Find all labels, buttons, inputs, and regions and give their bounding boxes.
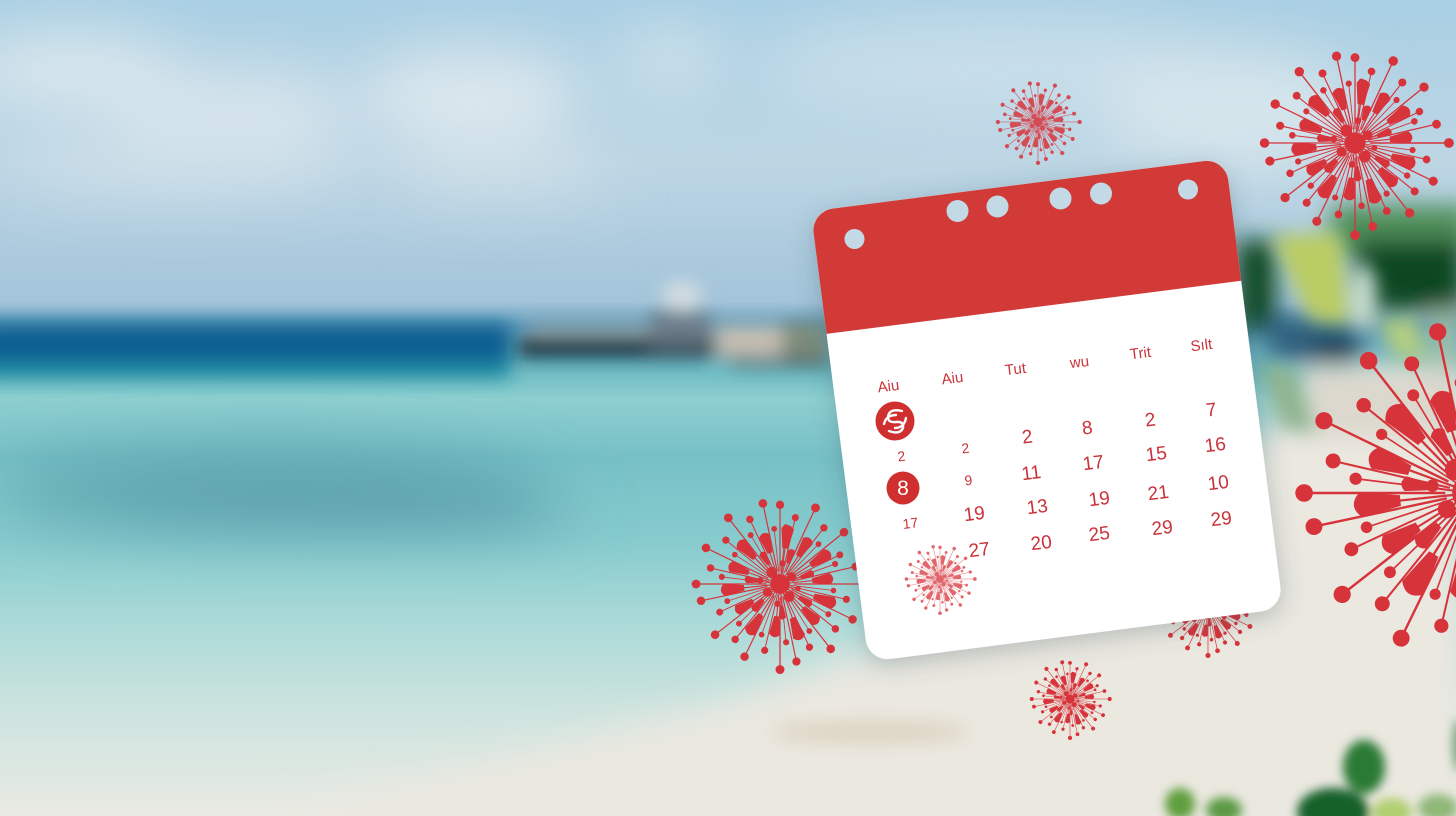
weekday labels: Tut xyxy=(1004,360,1028,379)
virus particle: on calendar xyxy=(905,545,977,615)
date numbers xyxy=(897,399,1233,562)
date numbers: 9 xyxy=(964,472,973,488)
date numbers: 29 xyxy=(1151,517,1174,540)
virus particle: top center xyxy=(996,81,1082,165)
date numbers: 11 xyxy=(1020,462,1042,485)
highlighted day: 8: 8 xyxy=(897,477,909,500)
date numbers: 10 xyxy=(1207,472,1230,495)
date numbers: 21 xyxy=(1147,482,1170,505)
weekday labels: wu xyxy=(1068,353,1090,372)
binding holes xyxy=(844,180,1198,249)
date numbers: 2 xyxy=(961,440,970,456)
date numbers: 29 xyxy=(1210,508,1233,531)
date numbers: 17 xyxy=(902,514,919,532)
date numbers: 13 xyxy=(1026,496,1049,519)
virus particle: lower right, behind calendar xyxy=(1157,556,1261,658)
date numbers: 2 xyxy=(1021,426,1034,449)
virus particle: top right xyxy=(1260,51,1454,240)
date numbers: 19 xyxy=(1088,488,1111,511)
date numbers: 2 xyxy=(897,448,906,464)
virus particle: left, behind calendar xyxy=(692,498,872,674)
weekday labels: Aiu xyxy=(941,369,964,388)
calendar card xyxy=(811,158,1283,662)
weekday labels xyxy=(877,336,1214,396)
date numbers: 25 xyxy=(1088,523,1111,546)
date numbers: 17 xyxy=(1082,452,1105,475)
date numbers: 19 xyxy=(963,503,986,526)
weekday labels: Sılt xyxy=(1190,336,1214,355)
weekday labels: Aiu xyxy=(877,377,900,396)
calendar body xyxy=(811,158,1283,662)
date numbers: 15 xyxy=(1145,443,1168,466)
date numbers: 16 xyxy=(1204,434,1227,457)
date numbers: 7 xyxy=(1205,399,1218,422)
weekday labels: Trit xyxy=(1129,344,1153,363)
highlighted day: 8 xyxy=(886,472,920,504)
virus particle: bottom center xyxy=(1030,660,1112,740)
date numbers: 20 xyxy=(1030,532,1053,555)
date numbers: 8 xyxy=(1081,417,1094,440)
virus particle: large right edge xyxy=(1295,322,1456,673)
calendar red header xyxy=(811,158,1241,334)
highlighted day: swirl badge xyxy=(876,402,914,440)
date numbers: 2 xyxy=(1144,409,1157,432)
date numbers: 27 xyxy=(968,539,991,562)
